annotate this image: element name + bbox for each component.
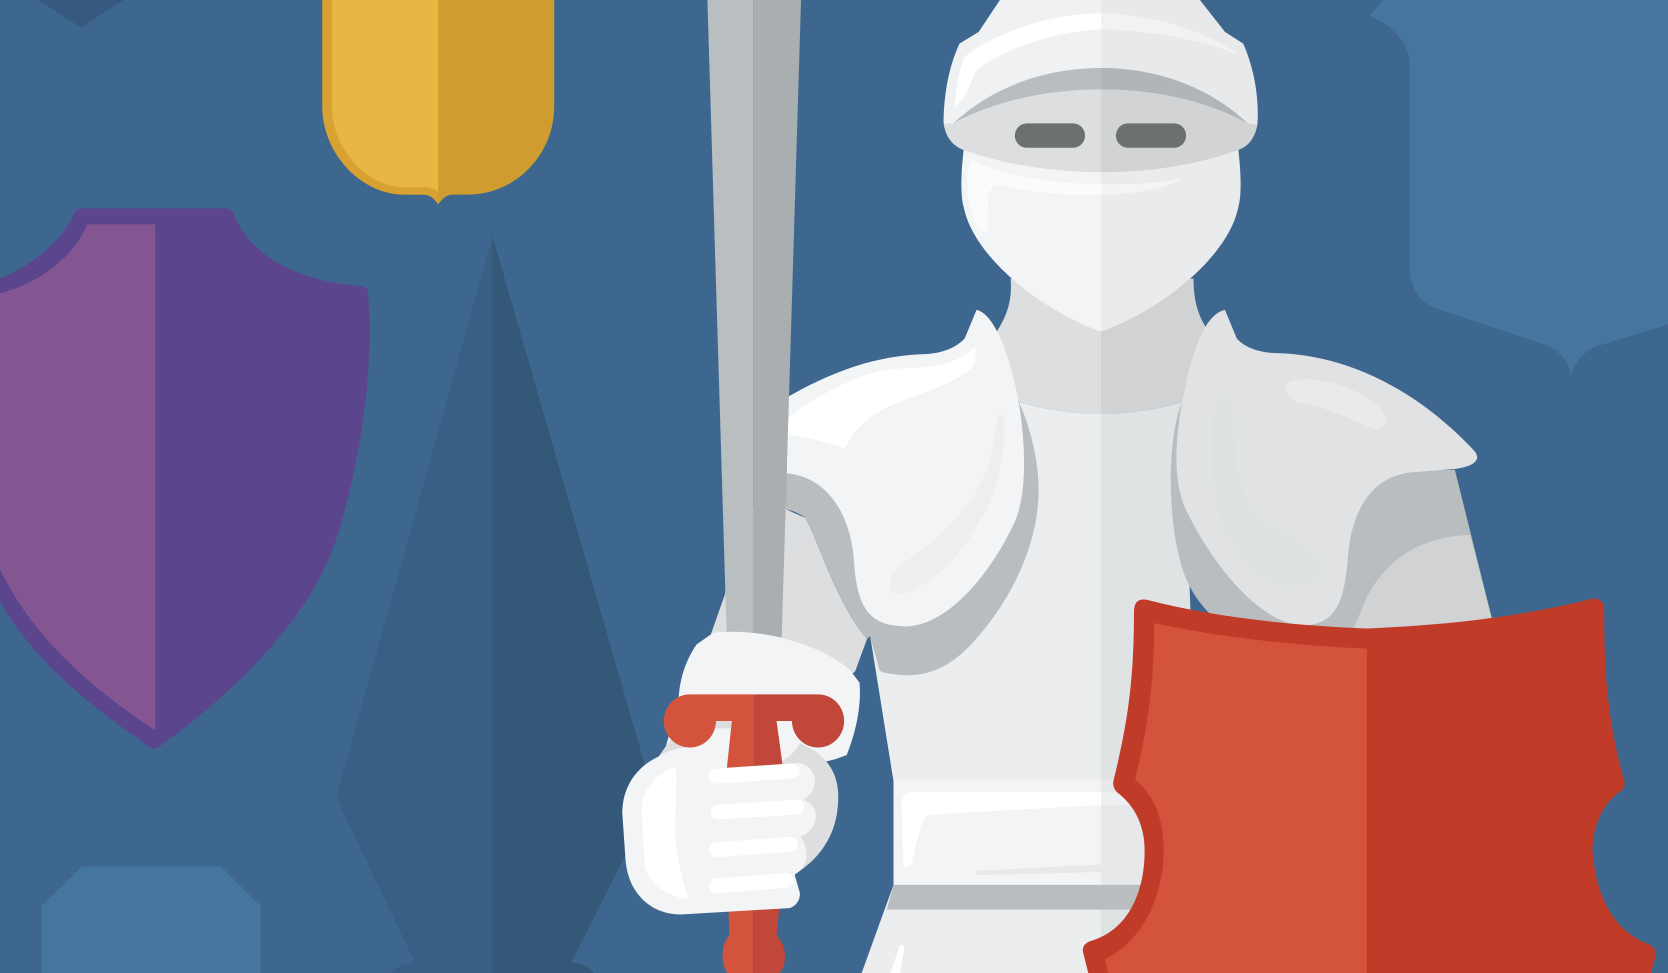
skirt highlight bbox=[890, 945, 904, 973]
crossguard bbox=[664, 694, 844, 771]
fist upper light bbox=[660, 728, 734, 776]
shield: red bbox=[1083, 599, 1656, 973]
arm shadow bbox=[786, 468, 888, 639]
fist shade bbox=[745, 743, 838, 875]
torso bbox=[870, 402, 1191, 893]
helmet bbox=[944, 0, 1258, 332]
icon: dark spear head bbox=[336, 236, 654, 973]
right arm and shadow bbox=[1171, 403, 1495, 630]
icon: blue shield bottom left bbox=[41, 867, 261, 973]
left pauldron bbox=[787, 310, 1024, 626]
visor bbox=[944, 89, 1257, 172]
right pauldron bbox=[1176, 310, 1477, 625]
knight bbox=[622, 0, 1656, 973]
icon: dark shield tip top left bbox=[38, 0, 123, 28]
left arm bbox=[702, 468, 867, 686]
icon: gold shield bbox=[322, 0, 554, 204]
sword blade bbox=[707, 0, 801, 702]
left pauldron shadow bbox=[870, 402, 1039, 675]
belt bbox=[894, 779, 1149, 885]
face guard bbox=[961, 149, 1241, 332]
neck bbox=[995, 279, 1207, 414]
visor shadow bbox=[953, 68, 1248, 123]
sword handle pommel bbox=[723, 904, 785, 973]
gauntlet cuff bbox=[665, 632, 860, 771]
eye slit left bbox=[1015, 123, 1085, 148]
cuff shade bbox=[657, 721, 734, 758]
belt band bbox=[887, 885, 1149, 910]
icon: purple shield bbox=[0, 208, 370, 749]
eye slit right bbox=[1116, 123, 1186, 148]
fist bbox=[622, 756, 816, 915]
icon: blue shield top right bbox=[1370, 0, 1668, 374]
skirt bbox=[862, 885, 1144, 973]
fingers bbox=[716, 771, 797, 886]
helmet dome bbox=[944, 0, 1258, 128]
